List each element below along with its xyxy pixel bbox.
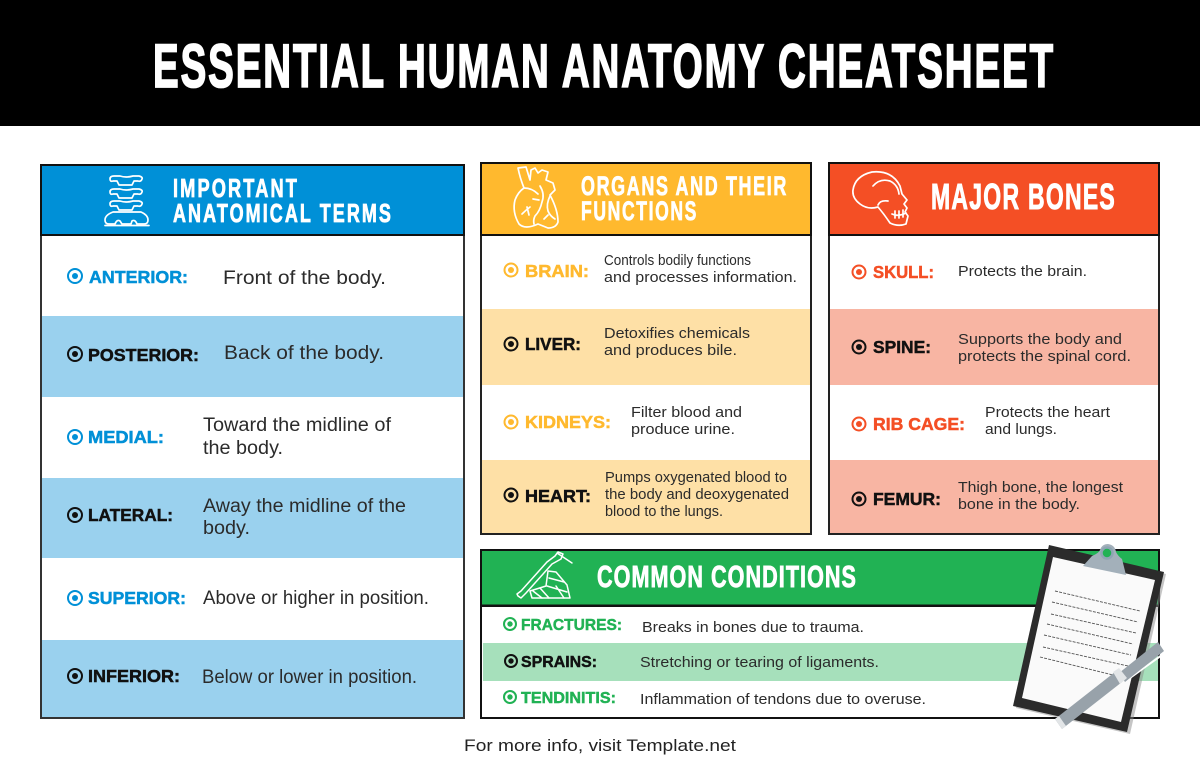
- panel header: anatomical terms: ANATOMICAL TERMS: [173, 198, 393, 228]
- panel: major bones: [829, 163, 1159, 534]
- row: kidneys: Filter blood and: [631, 405, 742, 421]
- row: rib cage: [852, 405, 1110, 438]
- panel header: anatomical terms: [41, 165, 464, 236]
- row: rib cage: Protects the heart: [985, 405, 1110, 421]
- icon: spine: [105, 176, 149, 226]
- row: superior: SUPERIOR:: [88, 588, 186, 608]
- row: skull: SKULL:: [873, 262, 934, 282]
- row: liver: Detoxifies chemicals: [604, 326, 750, 342]
- row: fractures: [504, 617, 864, 636]
- row: brain: Controls bodily functions: [604, 253, 751, 269]
- panel: common conditions: [481, 550, 1159, 718]
- row: heart: [482, 460, 810, 533]
- row: liver: and produces bile.: [604, 343, 737, 359]
- row: sprains: SPRAINS:: [521, 654, 597, 671]
- row: lateral: [42, 478, 463, 558]
- row: brain: and processes information.: [604, 270, 797, 286]
- row: fractures: Breaks in bones due to trauma.: [642, 620, 864, 636]
- icon: skull: [853, 172, 908, 225]
- panel header: organs: FUNCTIONS: [581, 196, 698, 226]
- title banner: [0, 0, 1200, 126]
- row: anterior: Front of the body.: [223, 268, 386, 289]
- row: lateral: Away the midline of the: [203, 496, 406, 517]
- row: femur: Thigh bone, the longest: [958, 480, 1123, 496]
- row: spine: Supports the body and: [958, 332, 1122, 348]
- icon: crutch and bandaged foot: [517, 552, 572, 598]
- row: heart: blood to the lungs.: [605, 504, 723, 520]
- clipboard board: [1013, 545, 1164, 732]
- row: lateral: LATERAL:: [88, 505, 173, 525]
- illustration: clipboard and pen: [1013, 544, 1166, 734]
- row: femur: [830, 460, 1158, 533]
- clipboard clip: [1083, 544, 1126, 575]
- row: tendinitis: [504, 690, 926, 708]
- panel header: anatomical terms: IMPORTANT: [173, 173, 299, 203]
- row: sprains: [483, 643, 1158, 681]
- row: heart: HEART:: [525, 486, 591, 506]
- row: kidneys: [504, 405, 742, 438]
- panel header: organs: [481, 163, 811, 236]
- row: liver: LIVER:: [525, 334, 581, 354]
- row: medial: [68, 415, 392, 459]
- row: medial: the body.: [203, 438, 283, 459]
- row: skull: [852, 262, 1087, 282]
- row: rib cage: and lungs.: [985, 422, 1057, 438]
- row: fractures: FRACTURES:: [521, 617, 622, 634]
- row: anterior: ANTERIOR:: [89, 267, 188, 287]
- panel: organs and their functions: [481, 163, 811, 534]
- row: kidneys: produce urine.: [631, 422, 735, 438]
- row: heart: the body and deoxygenated: [605, 487, 789, 503]
- clipboard paper: [1022, 557, 1155, 722]
- row: kidneys: KIDNEYS:: [525, 412, 611, 432]
- footer link text: For more info, visit Template.net: [464, 736, 736, 755]
- row: brain: BRAIN:: [525, 261, 589, 281]
- row: posterior: Back of the body.: [224, 343, 384, 364]
- row: rib cage: RIB CAGE:: [873, 414, 965, 434]
- row: medial: MEDIAL:: [88, 427, 164, 447]
- row: tendinitis: Inflammation of tendons due to overuse.: [640, 692, 926, 708]
- row: inferior: Below or lower in position.: [202, 667, 417, 688]
- row: inferior: INFERIOR:: [88, 666, 180, 686]
- panel header: bones: [829, 163, 1159, 236]
- panel header: organs: ORGANS AND THEIR: [581, 171, 788, 201]
- pen: [1055, 642, 1164, 729]
- panel header: conditions: [481, 550, 1159, 606]
- row: posterior: POSTERIOR:: [88, 345, 199, 365]
- row: medial: Toward the midline of: [203, 415, 392, 436]
- panel header: conditions: COMMON CONDITIONS: [597, 559, 857, 594]
- icon: heart: [514, 167, 558, 228]
- row: superior: [68, 588, 429, 609]
- row: skull: Protects the brain.: [958, 264, 1087, 280]
- row: spine: [830, 309, 1158, 385]
- panel: important anatomical terms: [41, 165, 464, 718]
- row: superior: Above or higher in position.: [203, 588, 429, 609]
- row: anterior: [68, 267, 386, 289]
- writing lines: [1040, 591, 1140, 675]
- row: femur: bone in the body.: [958, 497, 1080, 513]
- row: liver: [482, 309, 810, 385]
- row: brain: [504, 253, 797, 286]
- row: sprains: Stretching or tearing of ligaments.: [640, 655, 879, 671]
- row: spine: SPINE:: [873, 337, 931, 357]
- row: heart: Pumps oxygenated blood to: [605, 470, 787, 486]
- row: femur: FEMUR:: [873, 489, 941, 509]
- row: lateral: body.: [203, 518, 250, 539]
- row: tendinitis: TENDINITIS:: [521, 690, 616, 707]
- row: inferior: [42, 640, 463, 717]
- row: posterior: [42, 316, 463, 397]
- row: spine: protects the spinal cord.: [958, 349, 1131, 365]
